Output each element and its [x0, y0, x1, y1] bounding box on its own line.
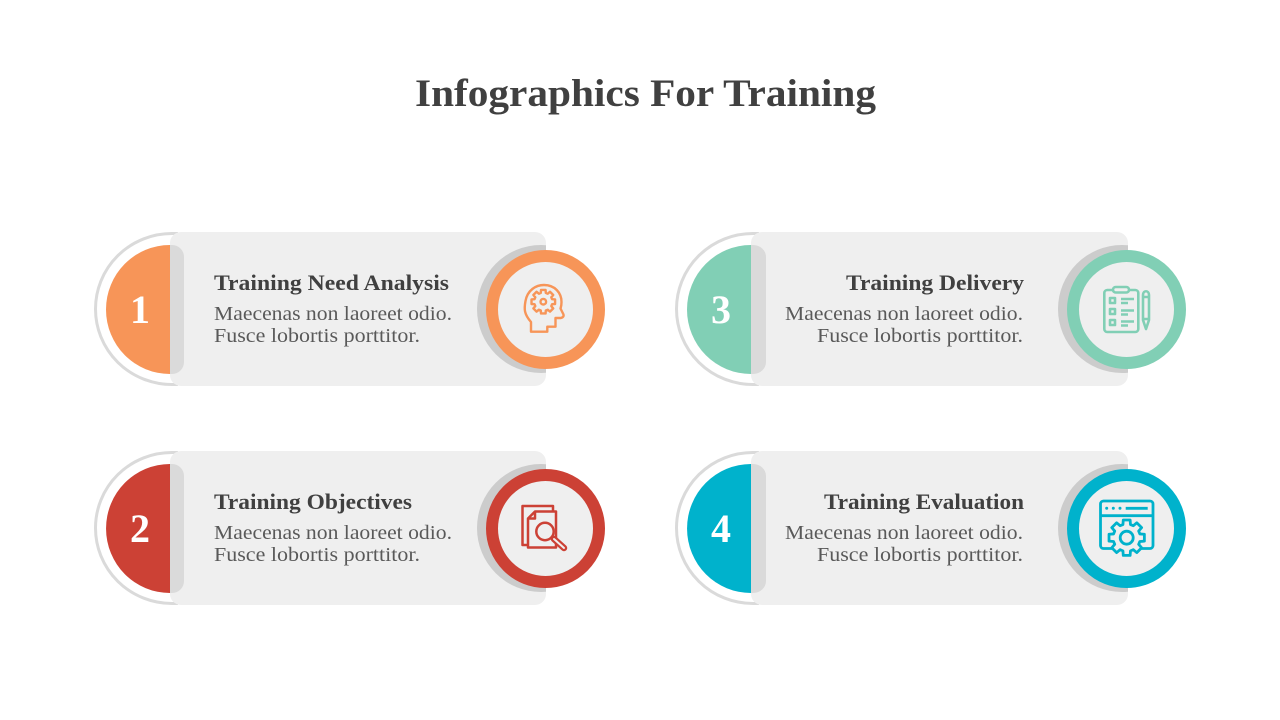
heading: Training Delivery — [846, 270, 1024, 295]
outer ring arc — [96, 234, 178, 384]
circle shadow — [477, 464, 546, 592]
icon: documents with magnifier — [522, 506, 564, 548]
body text — [214, 303, 452, 347]
grey strip — [170, 245, 184, 374]
body text: Maecenas non laoreet odio. — [785, 303, 1023, 325]
number: 4 — [711, 506, 731, 551]
number: 1 — [130, 287, 150, 332]
grey strip — [751, 245, 766, 374]
card background — [751, 232, 1128, 386]
body text — [785, 522, 1023, 566]
heading: Training Need Analysis — [214, 270, 449, 295]
outer ring arc — [96, 452, 178, 604]
number half circle — [687, 464, 751, 593]
body text: Fusce lobortis porttitor. — [817, 325, 1023, 347]
circle badge — [1073, 475, 1180, 582]
number: 2 — [130, 506, 150, 551]
body text — [214, 522, 452, 566]
panel: training objectives — [96, 451, 605, 605]
body text: Fusce lobortis porttitor. — [817, 544, 1023, 566]
icon: clipboard and pencil — [1104, 287, 1149, 332]
body text: Maecenas non laoreet odio. — [214, 522, 452, 544]
card background — [170, 451, 546, 605]
title: Infographics For Training — [415, 72, 877, 115]
grey strip — [170, 464, 184, 593]
circle badge — [1073, 256, 1180, 363]
circle shadow — [1058, 245, 1128, 373]
number half circle — [687, 245, 751, 374]
card background — [751, 451, 1128, 605]
card background — [170, 232, 546, 386]
panel: training need analysis — [96, 232, 605, 386]
circle shadow — [1058, 464, 1128, 592]
icon: browser window with gear — [1100, 501, 1153, 555]
body text: Maecenas non laoreet odio. — [214, 303, 452, 325]
body text: Maecenas non laoreet odio. — [785, 522, 1023, 544]
heading: Training Objectives — [214, 489, 412, 514]
circle badge — [492, 475, 599, 582]
outer ring arc — [677, 234, 759, 384]
body text: Fusce lobortis porttitor. — [214, 325, 420, 347]
outer ring arc — [677, 452, 759, 604]
circle shadow — [477, 245, 546, 373]
body text — [785, 303, 1023, 347]
heading: Training Evaluation — [824, 489, 1024, 514]
panel: training delivery — [677, 232, 1186, 386]
icon: head with gear — [525, 285, 564, 332]
circle badge — [492, 256, 599, 363]
body text: Fusce lobortis porttitor. — [214, 544, 420, 566]
number: 3 — [711, 287, 731, 332]
grey strip — [751, 464, 766, 593]
number half circle — [106, 464, 170, 593]
number half circle — [106, 245, 170, 374]
panel: training evaluation — [677, 451, 1186, 605]
